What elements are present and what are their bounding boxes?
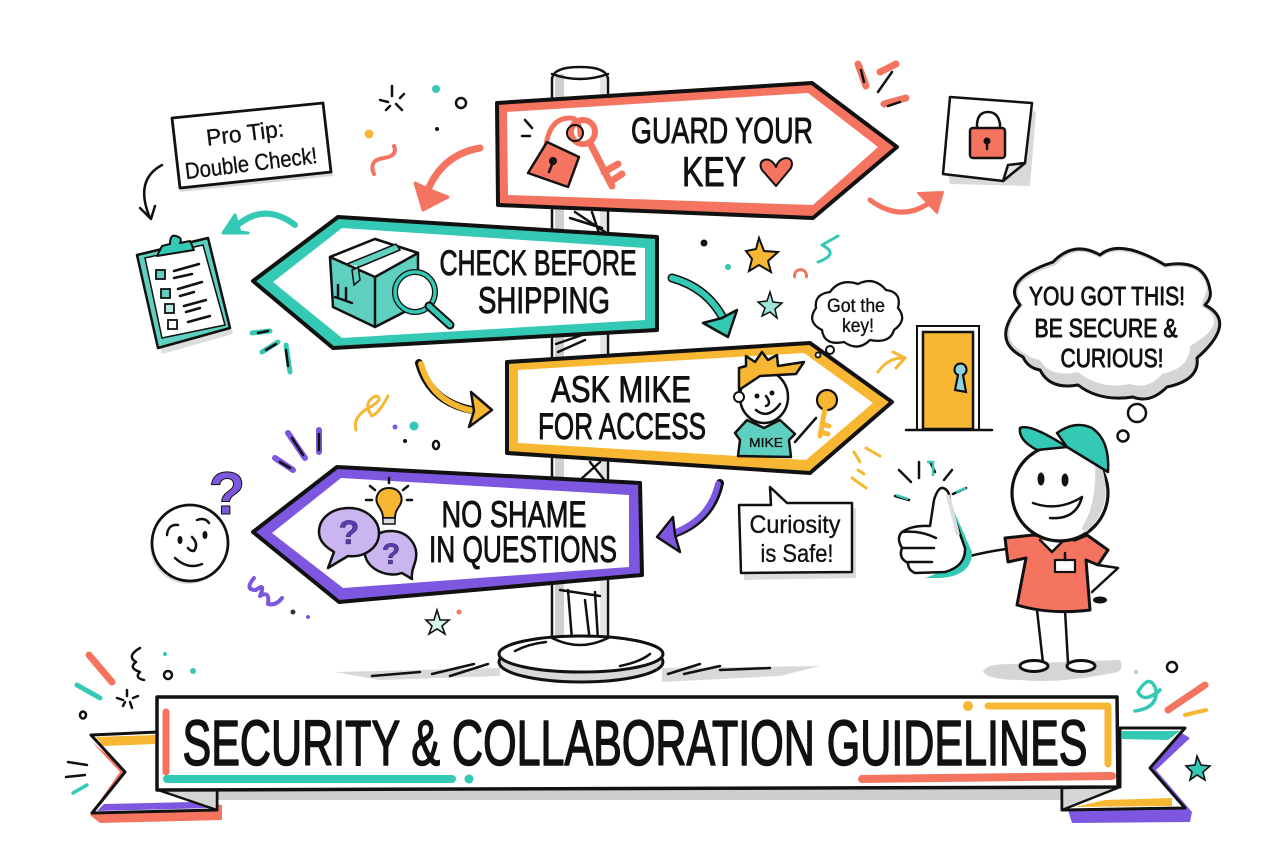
- sign text: CHECK BEFORE: [440, 244, 636, 283]
- thought cloud: got the key: key!: [842, 316, 874, 337]
- icon: clipboard: [137, 236, 233, 354]
- thought cloud: got the key: [812, 281, 902, 358]
- speech cloud: you got this: YOU GOT THIS!: [1029, 281, 1185, 311]
- signpost pole: [335, 67, 820, 682]
- arrow: coral to teal sign: [415, 148, 480, 210]
- sign: check before shipping: [253, 217, 657, 348]
- icon: question bubbles and bulb: ?: [339, 514, 359, 552]
- arrow: yellow to purple: [657, 483, 720, 552]
- icon: heart: [761, 158, 792, 186]
- sign: guard your key: [497, 83, 897, 218]
- speech cloud: you got this: BE SECURE &: [1034, 313, 1178, 343]
- banner body: [157, 697, 1118, 790]
- banner: title ribbon: [88, 697, 1192, 823]
- icon: sticky note with lock: [943, 97, 1036, 186]
- sign: guard your key: KEY: [682, 148, 746, 195]
- arrow: to yellow sign: [419, 363, 492, 427]
- sign: no shame in questions: [253, 467, 642, 602]
- icon: parcel with magnifier: [330, 239, 450, 327]
- note: pro tip: [140, 103, 333, 219]
- character: mascot thumbs up: [899, 425, 1122, 681]
- speech note: curiosity is safe: is Safe!: [760, 540, 834, 568]
- note: pro tip: Double Check!: [183, 142, 319, 184]
- icon: question bubbles and bulb: ?: [382, 538, 400, 571]
- decoration: confetti: [66, 64, 1210, 793]
- character: thinking face: [150, 460, 245, 584]
- icon: door: [906, 326, 992, 430]
- character: thinking face: ?: [209, 460, 245, 527]
- ribbon tail left: [88, 732, 222, 823]
- speech cloud: you got this: CURIOUS!: [1060, 343, 1164, 373]
- sign text: ASK MIKE: [551, 369, 691, 410]
- arrow: teal to clipboard: [223, 214, 295, 233]
- banner shadow: [165, 788, 1062, 800]
- sign: no shame in questions: IN QUESTIONS: [429, 529, 617, 570]
- arrow: to door: [878, 352, 905, 372]
- icon: padlock and key: [522, 118, 622, 187]
- thought cloud: got the key: Got the: [827, 296, 885, 317]
- speech note: curiosity is safe: Curiosity: [750, 511, 841, 539]
- sign: check before shipping: SHIPPING: [478, 280, 610, 321]
- arrow: coral to sticky note: [870, 192, 943, 213]
- sign: ask mike for access: [507, 343, 892, 473]
- note: pro tip: Pro Tip:: [205, 115, 285, 151]
- ribbon tail right: [1062, 728, 1192, 823]
- icon: mike holding key: [734, 352, 837, 457]
- sign text: GUARD YOUR: [631, 110, 813, 151]
- sign: ask mike for access: FOR ACCESS: [538, 406, 706, 447]
- icon: mike holding key: MIKE: [749, 435, 783, 450]
- speech note: curiosity is safe: [739, 487, 856, 580]
- sign text: NO SHAME: [442, 494, 586, 535]
- icon: question bubbles and bulb: [319, 478, 416, 579]
- speech cloud: you got this: [1006, 248, 1220, 442]
- arrow: teal to yellow sign: [672, 278, 737, 337]
